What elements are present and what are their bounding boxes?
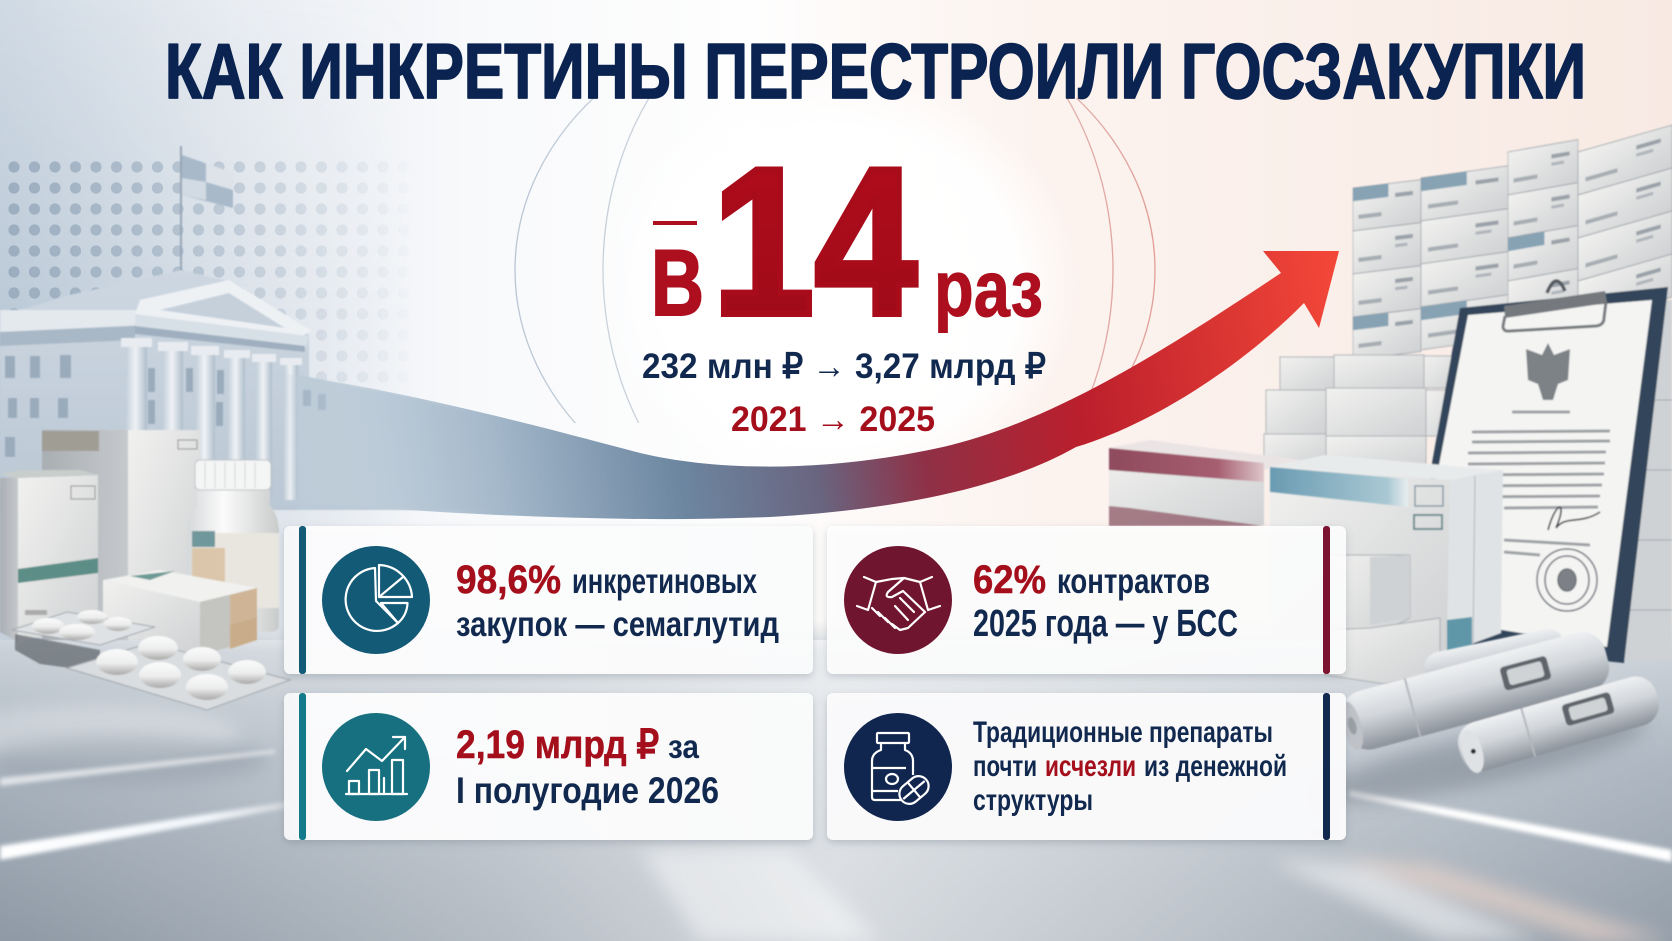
icon: growth chart — [322, 713, 430, 821]
signature — [1548, 507, 1600, 530]
blister 2 — [67, 636, 290, 710]
headline figure — [651, 124, 1043, 359]
icon: bottle and pill — [844, 713, 952, 821]
pen back — [1421, 626, 1567, 689]
text — [456, 558, 779, 644]
medicine group left — [0, 430, 290, 710]
document lines — [1462, 412, 1610, 555]
card: first half 2026 — [284, 693, 813, 840]
card: traditional drugs — [827, 693, 1346, 840]
text: 2,19 млрд ₽ — [456, 723, 659, 767]
clipboard — [1400, 281, 1668, 663]
emblem — [1526, 343, 1570, 400]
text: контрактов — [1057, 562, 1210, 601]
text: почти — [973, 750, 1037, 783]
clip — [1503, 281, 1607, 331]
halftone dots — [8, 161, 379, 382]
text: из денежной — [1144, 750, 1287, 783]
text: 62% — [973, 558, 1046, 602]
wing and roof — [0, 270, 309, 510]
text — [456, 723, 719, 811]
number 14: 14 — [712, 124, 917, 359]
government building — [0, 146, 560, 510]
teal box — [1270, 455, 1503, 660]
box stacks right — [1109, 125, 1672, 684]
pen front — [1453, 671, 1664, 776]
mid stack — [1264, 355, 1460, 470]
text — [973, 716, 1287, 817]
text: I полугодие 2026 — [456, 770, 719, 811]
icon: pie chart — [322, 546, 430, 654]
card: BSS — [827, 526, 1346, 674]
pen middle — [1335, 627, 1614, 755]
years: 2021 → 2025 — [731, 400, 935, 439]
columns — [126, 345, 298, 505]
back box — [42, 430, 200, 640]
text: Традиционные препараты — [973, 716, 1273, 749]
card: semaglutide — [284, 526, 813, 674]
text: исчезли — [1045, 750, 1136, 783]
text: закупок — семаглутид — [456, 605, 779, 644]
suffix: раз — [934, 244, 1043, 333]
flag — [180, 146, 233, 272]
icon: handshake — [844, 546, 952, 654]
text — [973, 558, 1238, 645]
front box — [0, 470, 98, 642]
small box — [103, 570, 257, 655]
blister 1 — [12, 610, 155, 672]
central glow — [598, 70, 1078, 500]
wave arrow — [270, 251, 1339, 519]
windows — [5, 355, 326, 457]
prefix: В — [651, 230, 704, 335]
maroon box — [1109, 440, 1300, 526]
concentric rings — [514, 98, 1156, 423]
stamp — [1537, 549, 1597, 611]
text: 2025 года — у БСС — [973, 603, 1238, 645]
pediment — [135, 280, 312, 337]
amount comparison: 232 млн ₽ → 3,27 млрд ₽ — [642, 347, 1046, 386]
small boxes — [1325, 555, 1440, 684]
bottle — [187, 460, 279, 632]
tall stack — [1353, 125, 1672, 660]
text: инкретиновых — [572, 562, 757, 601]
text: за — [668, 728, 700, 765]
insulin pens — [1309, 626, 1664, 820]
text: 98,6% — [456, 558, 561, 602]
text: структуры — [973, 784, 1093, 817]
